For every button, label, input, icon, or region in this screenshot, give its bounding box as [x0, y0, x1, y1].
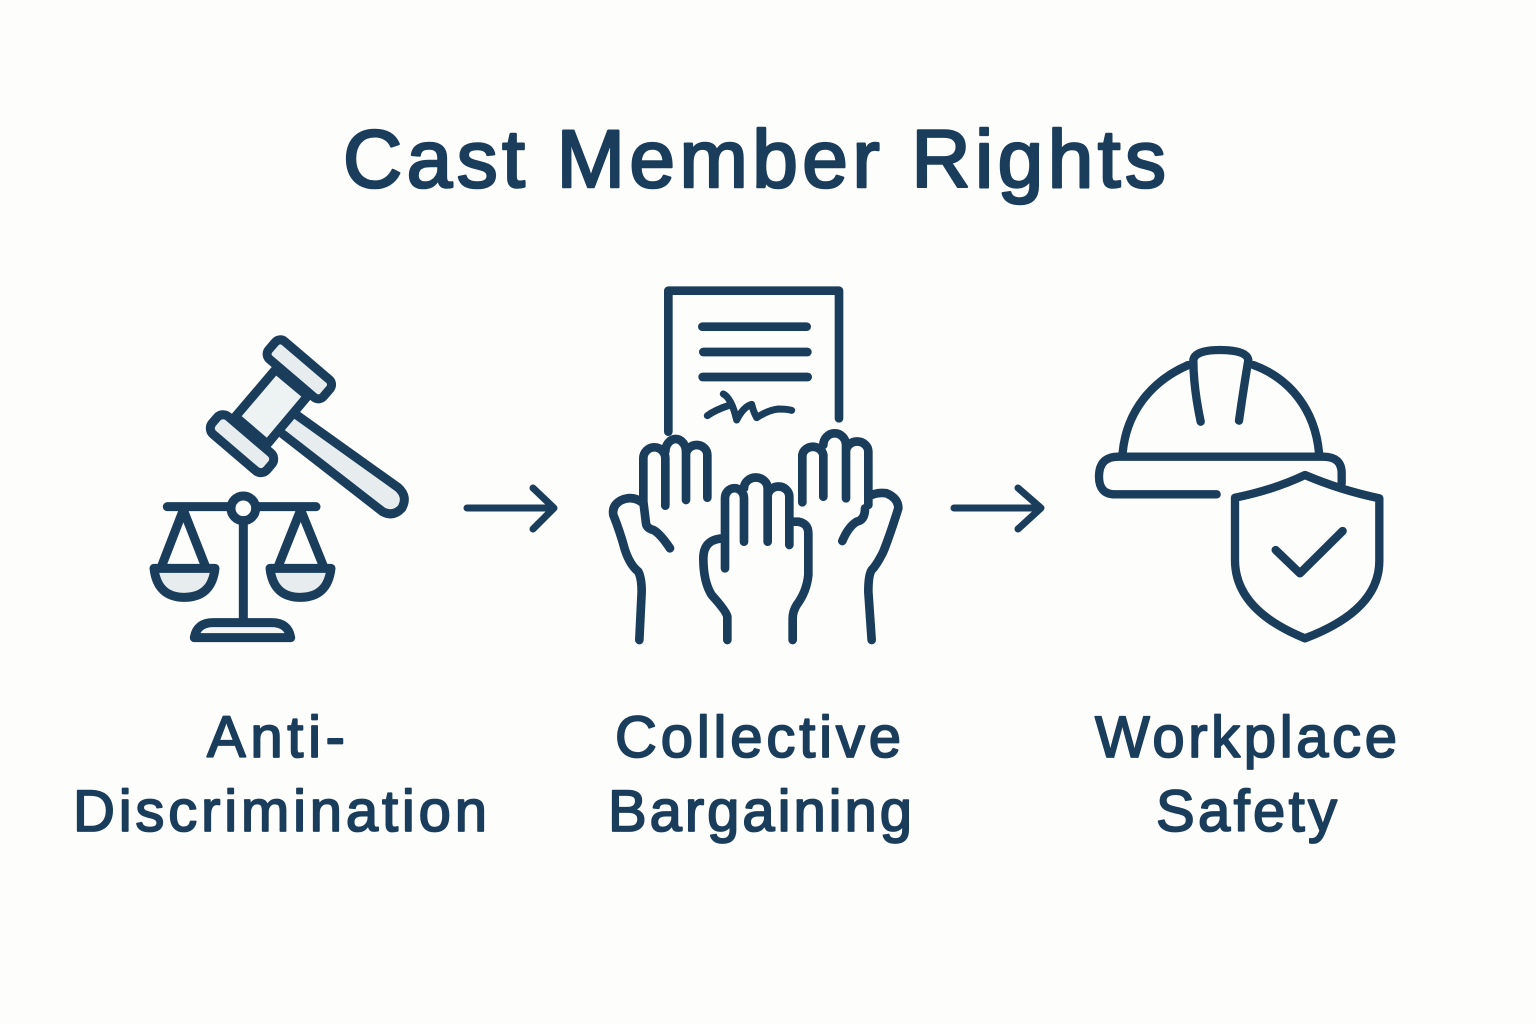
arrow 1 — [467, 488, 554, 529]
label: Workplace Safety: Safety — [1156, 779, 1337, 844]
hard hat brim — [1099, 457, 1342, 494]
gavel top cap — [264, 337, 334, 402]
middle hand — [703, 478, 808, 640]
hard hat ridge — [1193, 350, 1248, 422]
icon: contract and raised hands — [613, 291, 898, 640]
arrow 2 — [954, 488, 1041, 529]
icon: gavel and scales — [154, 337, 404, 638]
hard hat dome — [1123, 365, 1319, 453]
label: Anti-Discrimination: Anti- — [207, 705, 345, 770]
right pan strings — [278, 510, 323, 566]
scale pivot — [231, 496, 256, 521]
scale base — [194, 623, 291, 638]
gavel bottom cap — [207, 411, 277, 476]
left pan — [154, 568, 215, 597]
label: Collective Bargaining: Bargaining — [608, 779, 912, 844]
gavel handle — [283, 415, 404, 514]
shield — [1235, 475, 1379, 638]
left hand — [613, 439, 707, 640]
label: Collective Bargaining: Collective — [615, 705, 901, 770]
icon: hard hat and shield — [1099, 350, 1379, 638]
signature — [707, 394, 792, 420]
label: Workplace Safety — [1095, 705, 1397, 844]
right pan — [270, 568, 331, 597]
scale beam — [167, 493, 316, 520]
right hand — [802, 433, 898, 640]
gavel body — [235, 369, 308, 444]
left pan strings — [162, 510, 205, 566]
check mark — [1276, 531, 1343, 573]
label: Workplace Safety: Workplace — [1095, 705, 1397, 770]
contract lines — [702, 327, 808, 377]
scale post — [230, 520, 257, 622]
title: Cast Member Rights — [343, 114, 1166, 205]
contract page — [668, 291, 839, 432]
label: Collective Bargaining — [608, 705, 912, 844]
label: Anti-Discrimination: Discrimination — [73, 779, 487, 844]
label: Anti-Discrimination — [73, 705, 487, 844]
